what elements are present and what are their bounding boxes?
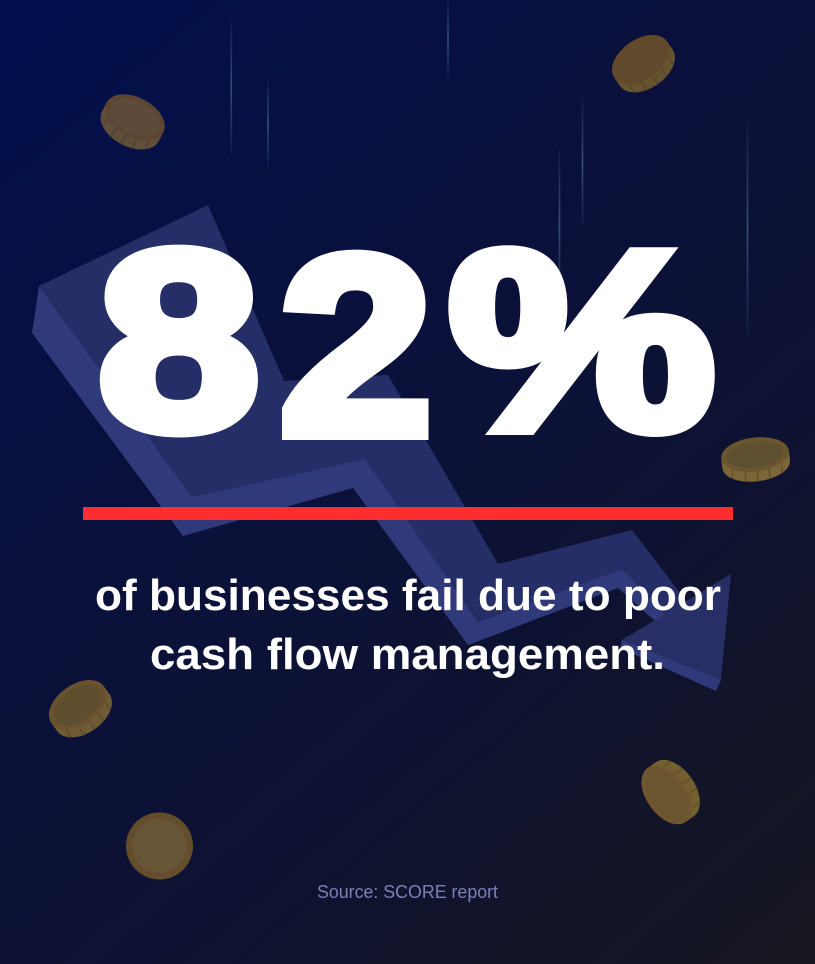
headline statistic: 8 [98,198,259,483]
coin: top left [93,85,173,159]
coin: top right [603,25,684,103]
coin: bottom left, face on [126,812,193,880]
coin: right [719,433,792,485]
headline statistic: 2 [280,204,432,488]
downward arrow [32,205,731,691]
coin: lower right [631,751,710,833]
coin: lower left [40,670,121,748]
source note: Source: SCORE report [317,882,498,902]
headline statistic [98,198,715,488]
falling streaks [230,0,748,336]
description text: of businesses fail due to poor [95,571,721,620]
red divider bar [83,507,733,520]
headline statistic: % [448,199,715,482]
description text: cash flow management. [150,630,665,679]
description text [95,571,721,679]
